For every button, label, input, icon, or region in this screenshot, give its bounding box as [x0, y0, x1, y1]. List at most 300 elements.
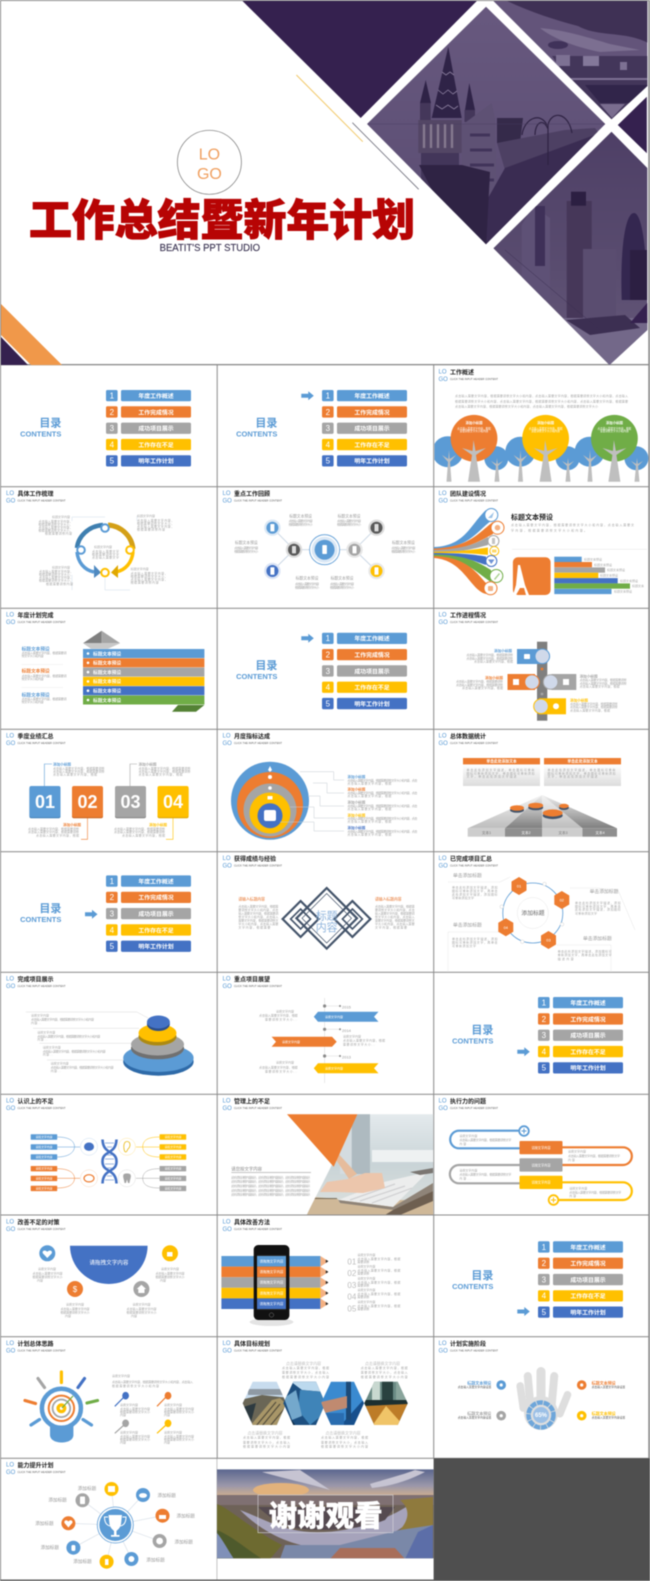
timeline text: 点击输入需要文字内容，根据 [474, 659, 513, 664]
phone mock-up: 请拖拽文字内容 [260, 1280, 284, 1285]
cycle text blocks: 标题文字内容 [52, 514, 70, 519]
slide header: LO [438, 370, 447, 376]
timeline text: 点击输入需要文字内容，根据 [580, 684, 620, 689]
contents list: 4 [326, 683, 331, 692]
panel: work progress timeline [438, 612, 627, 721]
ribbon bars [83, 649, 204, 704]
pin captions: 根据需要调整文字大小 [120, 1409, 150, 1414]
contents list: 成功项目展示 [570, 1276, 606, 1284]
slide header [438, 612, 498, 626]
left label tags: 请按文字内容 [36, 1155, 53, 1159]
hub labels: 标题文本预设 [289, 514, 312, 518]
pipe captions: 点击输入需要文字内容，根据需要调整文字 [459, 1137, 511, 1142]
tile captions: 点击输入需要文字内容，根据需要调整 [114, 829, 165, 834]
bulb rays [25, 1372, 98, 1425]
tile captions [28, 762, 190, 838]
decorative accent lines [296, 75, 419, 189]
slide header [438, 1340, 498, 1354]
left labels: 点击输入需要文字内容，根据需要调 [22, 673, 67, 678]
measure captions: 根据需要调整文字大小 [32, 1274, 62, 1279]
hub labels: 点击输入需要文字内容 [330, 581, 354, 586]
left text block: 文字内容，根据需要 [238, 924, 270, 930]
circle captions: 点击输入需要文字内容，根据需要调整文字大小和内容，点击 [347, 803, 417, 808]
cycle arcs and arrows [72, 516, 137, 590]
slide header: GO [438, 1348, 448, 1354]
number tile 04: 04 [163, 792, 183, 812]
slide header: 认识上的不足 [18, 1098, 54, 1106]
panel: thank you photo [217, 1469, 434, 1559]
timeline text: 点击输入需要文字内容，根据 [570, 707, 610, 712]
hexagon captions: 需要调整文字大小，点击输入 [243, 1439, 290, 1444]
bulb text: 根据需要调整文字大小和内容 [112, 1383, 159, 1388]
text card left: 单击此处添加文本 [486, 759, 517, 764]
tree labels: 需要调整文字大小和内容 [460, 429, 489, 433]
contents list [106, 875, 191, 952]
perspective platform: 文本2 [521, 830, 531, 835]
icon circles: $ [73, 1285, 78, 1294]
timeline axis: 2015 [342, 1004, 352, 1010]
slide header: 具体改善方法 [234, 1218, 270, 1226]
text card right: 单击此处添加文字描述，单击图标可重新 [548, 767, 616, 772]
ribbon captions: 点击输入需要文字内容，根据 [259, 1064, 298, 1069]
slide header: LO [438, 491, 447, 497]
pin captions: 内容 [164, 1440, 170, 1444]
contents list: 工作完成情况 [138, 894, 174, 902]
panel: key work hub [222, 490, 415, 589]
panel: specific improvement methods phone [221, 1218, 400, 1326]
ribbon captions: 需要调整文字大小... [265, 1069, 297, 1074]
city aerial photo [217, 1469, 434, 1559]
hexagon photo 2 [282, 1381, 327, 1426]
contents heading: CONTENTS [20, 915, 61, 924]
step boxes: 请按文字内容 [531, 1162, 551, 1167]
panel: management shortfall photo [222, 1098, 434, 1216]
cycle text blocks: 点击输入需要文字内容， [39, 575, 73, 580]
cover dark triangle [242, 1, 477, 118]
contents list: 4 [542, 1292, 547, 1301]
DNA helix [102, 1140, 116, 1184]
stage icons [496, 1380, 586, 1420]
panel: contents slide 3 [236, 633, 407, 709]
timeline text: 添加小标题 [485, 675, 503, 680]
hub labels: 点击输入需要文字内容 [295, 581, 319, 586]
cycle text blocks: 点击输入需要文字 [92, 548, 119, 554]
bar labels [584, 556, 644, 594]
satellite labels: 添加标题 [158, 1492, 176, 1499]
contents heading: CONTENTS [236, 672, 277, 681]
layered cone [123, 1016, 194, 1076]
tree labels: 点击输入需要文字内容，根据 [457, 426, 491, 430]
panel: achievements diamonds [222, 855, 415, 949]
tile captions: 点击输入需要文字内容，根据 [53, 772, 97, 777]
slide header: 工作概述 [450, 368, 474, 376]
numbered list: 需要调整 [357, 1306, 369, 1311]
perspective platform: 文本3 [558, 830, 568, 835]
ring captions: 重新添加文字，再单击此处添加文字 [558, 952, 612, 957]
satellite labels: 添加标题 [146, 1556, 165, 1563]
ribbon captions: 点击输入需要文字内容，根据 [259, 1012, 298, 1018]
contents list: 3 [542, 1031, 547, 1040]
panel: key project outlook [222, 976, 385, 1083]
ring captions: 单击添加标题 [583, 935, 612, 942]
ribbon arrow blue: 请按文字内容 [325, 1014, 343, 1019]
right text block: 字大小和内容，点击输入需要 [375, 921, 415, 926]
timeline text: 点击输入需要文字内容，根据 [462, 685, 503, 690]
hexagon captions: 需要调整文字大小，点击输入 [282, 1370, 329, 1375]
contents heading: 目录 [255, 416, 277, 429]
cycle text blocks: 标题文字内容 [94, 544, 112, 549]
slide header: CLICK THE INPUT HEADER CONTENT [234, 498, 282, 502]
ring diagram: 02 [560, 898, 565, 902]
data discs [510, 803, 569, 819]
satellite icons [61, 1482, 170, 1569]
pin captions: 内容 [120, 1440, 126, 1444]
slide header: GO [6, 984, 16, 990]
ring captions: 图标可重新添加文字，再单击 [452, 939, 498, 944]
slide header: 年度计划完成 [18, 612, 54, 620]
panel: implementation stages hand [438, 1340, 625, 1430]
number tile 02: 02 [77, 792, 98, 812]
contents list: 工作存在不足 [570, 1292, 606, 1300]
timeline text: 添加小标题 [570, 698, 588, 702]
slide header [222, 855, 282, 870]
hexagon photo 4 [364, 1381, 409, 1426]
contents list: 1 [110, 877, 115, 886]
measure captions: 根据需要调整文字大小 [126, 1310, 156, 1314]
cone captions: 内容... [37, 1037, 47, 1042]
slide header: CLICK THE INPUT HEADER CONTENT [18, 1470, 66, 1474]
ribbon arrow orange: 请按文字内容 [282, 1039, 300, 1044]
slide header: GO [438, 741, 448, 747]
text card right: 图标可重新添加文字，单击图标可重新添加 [548, 770, 616, 775]
bulb text: 点击输入需要文字内容，根据需要调整文字大小和内容，点击输入 [112, 1379, 193, 1384]
slide header: 重点项目展望 [234, 976, 270, 984]
hub labels [234, 514, 415, 589]
pin captions: 请按文字内容 [120, 1430, 138, 1434]
pin captions [120, 1402, 194, 1444]
left labels: 点击输入需要文字内容，根据需要调 [22, 696, 67, 701]
pipe captions: 内容... [459, 1141, 472, 1146]
contents list: 工作完成情况 [138, 408, 174, 416]
hub labels: 根据需要调整文字大小 [234, 548, 258, 553]
cycle text blocks: 根据需要调整内容 [45, 530, 72, 536]
trophy centre [97, 1507, 133, 1543]
slide header: GO [6, 1106, 16, 1112]
measure captions [32, 1266, 184, 1318]
perspective platform: 文本4 [595, 830, 605, 835]
slide header: GO [438, 1106, 448, 1112]
slide header: GO [438, 498, 448, 504]
slide header: LO [6, 734, 14, 740]
perspective platform [468, 795, 617, 837]
tile captions: 添加小标题 [53, 762, 71, 766]
slide header: LO [6, 976, 14, 982]
slide header [438, 1098, 498, 1112]
phone mock-up: 请拖拽文字内容 [260, 1258, 284, 1264]
left text block: 输入需要文字内容，根据需要调 [238, 910, 278, 916]
contents list: 工作存在不足 [354, 684, 390, 692]
connector lines [280, 772, 344, 831]
satellite labels: 添加标题 [35, 1520, 54, 1527]
slide header [438, 732, 498, 747]
cycle text blocks: 点击输入需要文字内容， [137, 524, 174, 528]
pin captions: 点击输入需要文字内容 [120, 1406, 150, 1411]
satellite labels: 添加标题 [48, 1496, 67, 1503]
tree labels: 点击输入需要文字内容，根据 [598, 426, 632, 430]
ring captions: 单击此处添加文字描述，添加图标可 [558, 949, 612, 954]
contents list: 工作存在不足 [354, 441, 390, 449]
slide header: LO [438, 856, 447, 862]
stage captions: 标题文本预设 [592, 1410, 616, 1416]
slide header: 具体目标规划 [234, 1340, 270, 1348]
hub labels: 点击输入需要文字内容 [337, 518, 361, 523]
cone captions: 内容... [31, 1020, 41, 1025]
tree trunks [442, 440, 643, 482]
photo slide text: 此处添加详细内容提示，此处添加详细内容提示，此处添加详细内容提示 [231, 1187, 310, 1192]
contents list: 4 [326, 440, 331, 449]
contents list: 明年工作计划 [138, 943, 174, 951]
panel: improvement measures half circle [6, 1218, 184, 1318]
panel: completed results ring [438, 855, 635, 972]
timeline text: 添加小标题 [580, 674, 598, 678]
hexagon captions: 点击请替换文字内容 [248, 1430, 283, 1436]
slide header: CLICK THE INPUT HEADER CONTENT [450, 1348, 498, 1352]
number tile 02 [72, 786, 103, 818]
tile captions: 点击输入需要文字内容，根据需要调整 [28, 826, 79, 831]
hexagon captions: 根据需要调整文字大小内容 [361, 1374, 408, 1379]
hand graphic [516, 1367, 572, 1430]
hand graphic: 65% [535, 1413, 548, 1419]
hub labels: 根据需要调整文字大小 [337, 521, 361, 526]
right text block: 文字内容，根据需要 [375, 924, 407, 930]
cover photo triangle: skyline [490, 0, 650, 125]
slide header: CLICK THE INPUT HEADER CONTENT [234, 864, 282, 868]
contents heading: 目录 [255, 659, 277, 672]
slide header [222, 1098, 282, 1112]
ribbon captions: 需要调整文字大小... [265, 1016, 297, 1021]
satellite labels: 添加标题 [175, 1538, 193, 1545]
left text block [238, 896, 278, 930]
hexagon captions: 根据需要调整文字大小内容 [282, 1374, 329, 1379]
ribbon bars: 标题文本预设 [93, 678, 121, 685]
contents heading [236, 416, 277, 438]
left labels: 标题文本预设 [22, 692, 50, 698]
hexagon captions: 根据需要调整文字大小内容 [321, 1444, 368, 1449]
hexagon captions: 需要调整文字大小，点击输入 [321, 1439, 368, 1444]
contents list: 2 [326, 650, 331, 659]
measure captions: 根据需要调整文字大小 [60, 1310, 90, 1314]
slide header: CLICK THE INPUT HEADER CONTENT [234, 984, 282, 988]
contents heading: CONTENTS [236, 429, 277, 438]
numbered list: 需要调整 [357, 1271, 369, 1276]
tree labels: 添加小标题 [606, 420, 623, 425]
hub labels: 根据需要调整文字大小 [295, 584, 319, 589]
pipe captions: 点击输入需要文字内容，根据需要调整文字 [459, 1172, 511, 1176]
slide header [438, 855, 498, 870]
cycle text blocks: 点击输入需要文字 [92, 554, 119, 560]
cone captions: 点击输入需要文字内容，根据需要调整文字大小和内容 [51, 1065, 114, 1070]
slide header: GO [6, 620, 16, 626]
numbered list: 04 [347, 1293, 357, 1302]
slide header [222, 976, 282, 990]
left label tags: 请按文字内容 [36, 1167, 53, 1171]
ribbon tail [172, 705, 204, 712]
panel: completed projects cone [6, 976, 194, 1076]
ring captions: 此处添加文字描述，添加图标 [575, 907, 621, 912]
slide header: GO [6, 498, 16, 504]
timeline text: 点击输入需要文字内容，根据需要调整 [456, 678, 503, 684]
circle captions: 点击输入需要文字内容，根据 [347, 819, 391, 824]
slide header: CLICK THE INPUT HEADER CONTENT [450, 620, 498, 624]
slide header [6, 1218, 66, 1233]
measure captions: 内容 [160, 1278, 166, 1282]
numbered list: 需要调整 [357, 1294, 369, 1299]
slide header: 季度业绩汇总 [18, 732, 54, 740]
slide header: 总体数据统计 [450, 732, 486, 740]
thank you text: 谢谢观看 [269, 1500, 383, 1533]
slide header: LO [222, 491, 231, 497]
connectors [44, 764, 173, 839]
cycle text blocks: 根据需要调整文字大小， [38, 522, 72, 526]
contents list: 明年工作计划 [354, 700, 390, 708]
text card right [544, 758, 621, 786]
cycle text blocks: 根据需要调整文字大小， [131, 573, 168, 578]
slide header: LO [6, 1462, 14, 1468]
hexagon captions: 点击请替换文字内容 [326, 1430, 361, 1436]
slide header: GO [6, 1227, 16, 1233]
contents heading: 目录 [39, 416, 61, 429]
circle captions: 点击输入需要文字内容，根据 [347, 780, 391, 786]
arrow [301, 391, 314, 400]
slide header [6, 1098, 66, 1112]
left labels: 整文字大小和内容 [22, 699, 44, 704]
hexagon captions: 点击输入需要文字内容，根据 [282, 1365, 329, 1370]
bulb text [112, 1373, 193, 1388]
right text block: 请输入标题内容 [375, 896, 402, 902]
ring captions: 图标可重新添加文字，再单击 [452, 888, 498, 893]
panel: awareness shortfall DNA [6, 1098, 186, 1191]
leader lines [26, 1012, 148, 1060]
timeline axis: 2013 [342, 1054, 352, 1060]
icon circles [80, 1138, 135, 1187]
right text block: 输入需要文字内容，根据需要调 [375, 910, 415, 916]
slide header: CLICK THE INPUT HEADER CONTENT [450, 864, 498, 868]
left label tags: 请按文字内容 [36, 1135, 53, 1139]
hub labels: 标题文本预设 [338, 514, 361, 518]
slide header: LO [6, 612, 14, 618]
contents heading [20, 416, 61, 438]
contents list: 成功项目展示 [570, 1032, 606, 1040]
intro text: 点击输入需要文字内容，根据需要调整文字大小和内容，点击输入需要文字内容，根据需要调整文字大小 [455, 404, 598, 409]
circle captions [347, 774, 417, 836]
tile captions: 添加小标题 [149, 822, 167, 827]
hub labels: 标题文本预设 [392, 540, 415, 545]
contents heading: 目录 [39, 902, 61, 915]
hexagon photo 3 [320, 1381, 365, 1426]
arrow [517, 1307, 530, 1316]
arrow [301, 634, 314, 643]
ring captions: 单击添加标题 [453, 922, 482, 929]
left text block: 要调整文字大小和内容，点击 [238, 907, 278, 912]
slide header [6, 612, 66, 626]
contents list: 4 [110, 926, 115, 935]
photo slide text [231, 1166, 311, 1197]
panel: cover slide [1, 0, 650, 370]
measure captions: 根据需要调整文字大小 [156, 1274, 184, 1279]
cycle text blocks: 标题文字内容 [131, 566, 149, 571]
slide header: LO [222, 976, 231, 982]
contents list: 明年工作计划 [570, 1308, 606, 1316]
contents list: 5 [326, 457, 331, 466]
slide header: 月度指标达成 [234, 732, 270, 740]
horizontal bars [554, 557, 630, 594]
half circle [70, 1246, 148, 1284]
contents list: 成功项目展示 [354, 667, 390, 675]
hexagon captions: 根据需要调整文字大小内容 [243, 1444, 290, 1449]
pin captions: 点击输入需要文字内容 [164, 1434, 194, 1438]
ribbon bars: 标题文本预设 [93, 669, 121, 676]
bar labels: 标题文本预设 [594, 562, 612, 567]
cycle text blocks: 点击输入需要文字内容， [39, 569, 73, 574]
cone captions: 请按文字内容 [43, 1044, 61, 1049]
photo slide text: 请您按文字内容 [231, 1166, 263, 1172]
cycle text blocks: 根据需要调整内容 [137, 526, 165, 532]
curved connectors [57, 1137, 160, 1188]
pin captions: 点击输入需要文字内容 [120, 1434, 150, 1438]
hexagon captions: 点击输入需要文字内容，根据 [321, 1435, 368, 1440]
hub labels: 标题文本预设 [296, 576, 319, 580]
numbered list: 02 [347, 1269, 357, 1278]
slide header: GO [222, 1227, 232, 1233]
ring diagram: 03 [546, 938, 551, 942]
right text block: 点击输入需要文字内容，根据需 [375, 904, 415, 908]
photo slide text: 此处添加详细内容提示，此处添加详细内容提示，此处添加详细内容提示 [231, 1183, 310, 1188]
contents list: 5 [110, 942, 115, 951]
hub labels: 标题文本预设 [235, 540, 258, 545]
slide header: 完成项目展示 [18, 976, 54, 984]
contents list: 年度工作概述 [354, 392, 390, 400]
contents list [538, 1241, 623, 1318]
cycle text blocks: 根据需要调整文字大小， [137, 520, 174, 526]
contents list: 2 [326, 408, 331, 417]
pipe captions: 请按文字内容 [569, 1186, 587, 1190]
left label tags: 请按文字内容 [36, 1186, 53, 1190]
cover photo diamond: city towers [490, 130, 650, 370]
push pins [115, 1392, 171, 1433]
cycle text blocks: 点击输入需要文字内容， [137, 518, 174, 522]
slide header: LO [6, 1341, 14, 1347]
numbered list: 01 [347, 1258, 357, 1266]
pipe captions: 内容... [568, 1157, 580, 1162]
pipe captions [459, 1133, 621, 1198]
contents heading [236, 659, 277, 681]
slide header: CLICK THE INPUT HEADER CONTENT [450, 741, 498, 745]
ring captions: 描述内容 [558, 956, 574, 961]
numbered list: 需要调整 [357, 1282, 369, 1287]
ring captions: 可重新添加文字 [575, 910, 597, 916]
pipe captions: 请按文字内容 [568, 1148, 586, 1154]
ring captions: 此处添加文字描述，添加图标 [452, 891, 498, 896]
photo slide text: 此处添加详细内容提示，此处添加详细内容提示，此处添加详细内容提示 [231, 1192, 310, 1197]
nested circles [231, 762, 309, 840]
hexagon photo 1 [242, 1381, 286, 1426]
pin captions: 根据需要调整文字大小 [120, 1436, 150, 1442]
contents heading [452, 1023, 493, 1045]
measure captions: 请按文字内容 [66, 1302, 84, 1306]
slide header: GO [6, 1348, 16, 1354]
numbered list: 需要调整 [357, 1259, 369, 1264]
tile captions: 添加小标题 [63, 822, 81, 827]
